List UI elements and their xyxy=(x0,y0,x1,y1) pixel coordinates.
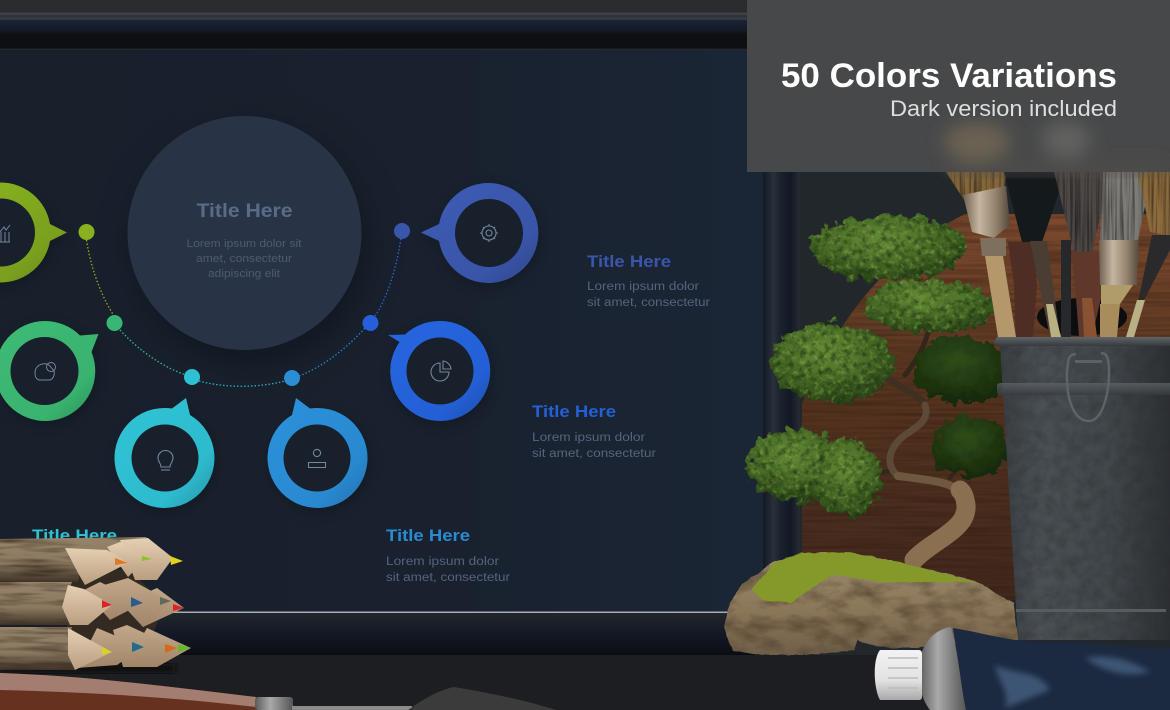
dark foliage clusters xyxy=(912,337,1012,478)
chart node: sea green dot xyxy=(106,315,122,331)
pencil row: middle xyxy=(0,578,184,627)
icon: person xyxy=(308,449,326,468)
moss xyxy=(752,552,977,603)
panel: wooden palette behind tree xyxy=(802,214,1170,600)
body: Lorem ipsum dolor xyxy=(386,556,499,568)
frame right post xyxy=(762,172,800,612)
icon: gear xyxy=(480,224,498,242)
knife rod xyxy=(292,706,412,710)
icon ring: indigo gear xyxy=(421,183,538,283)
illustration: metal bucket xyxy=(994,337,1170,640)
icon: light bulb xyxy=(158,451,173,470)
body xyxy=(532,432,656,460)
panel: translucent caption box xyxy=(747,0,1170,173)
central title: Title Here xyxy=(196,201,292,222)
brush: grey light bristles xyxy=(1099,172,1152,337)
illustration: rock with moss xyxy=(724,552,1018,655)
central disc xyxy=(128,116,362,350)
icon ring: sea green piggy bank xyxy=(0,321,99,421)
icon ring: cyan bulb xyxy=(114,398,214,508)
frame bottom xyxy=(0,612,763,656)
knife handle xyxy=(0,673,256,710)
knife blade xyxy=(408,687,556,710)
panel: central circle xyxy=(128,116,362,350)
body: sit amet, consectetur xyxy=(532,448,656,460)
body: Lorem ipsum dolor xyxy=(587,281,699,293)
central body text: adipiscing elit xyxy=(208,268,280,280)
panel: dark framed slide xyxy=(0,0,800,656)
tube shoulder xyxy=(919,627,966,710)
bucket band xyxy=(997,383,1170,395)
chart: dotted arc connecting the dots xyxy=(86,238,401,386)
illustration: paint brushes xyxy=(946,172,1170,337)
chart node: royal dot xyxy=(362,315,378,331)
knife ferrule xyxy=(255,697,293,710)
text block: indigo xyxy=(587,252,710,309)
bonsai trunk xyxy=(880,370,966,560)
rock xyxy=(724,552,1018,655)
pencil row: bottom xyxy=(0,625,191,670)
slide background xyxy=(0,50,763,612)
central body text: amet, consectetur xyxy=(196,253,292,265)
text block: cyan, partly hidden: Title Here xyxy=(32,526,117,545)
central body text: Lorem ipsum dolor sit xyxy=(186,238,302,250)
brush: black bristles xyxy=(1004,172,1066,337)
heading: Title Here xyxy=(587,252,671,271)
knife handle highlight xyxy=(0,673,256,707)
chart node: blue dot xyxy=(284,370,300,386)
icon: bar chart xyxy=(0,225,10,242)
brush: tan bristles xyxy=(946,172,1016,337)
central body text xyxy=(186,238,302,280)
illustration: paint tube xyxy=(875,627,1170,710)
icon ring: blue person xyxy=(268,398,368,508)
illustration: bonsai tree xyxy=(747,215,1012,560)
body xyxy=(386,556,510,584)
dark hole in palette xyxy=(1037,298,1127,336)
bucket lower band xyxy=(1016,609,1166,612)
caption subheading: Dark version included xyxy=(890,96,1117,121)
chart node: indigo dot xyxy=(394,223,410,239)
body xyxy=(587,281,710,309)
body: sit amet, consectetur xyxy=(587,297,710,309)
chart node: cyan dot xyxy=(184,369,200,385)
caption heading: 50 Colors Variations xyxy=(781,57,1117,95)
icon ring: green chart xyxy=(0,182,67,282)
frame top xyxy=(0,0,762,52)
pencil row: top xyxy=(0,537,183,585)
bucket body xyxy=(1000,345,1170,640)
pencil dark backing xyxy=(62,565,165,660)
pencil shadow on table xyxy=(0,664,175,673)
text block: royal blue xyxy=(532,402,656,460)
brush: grey bristles xyxy=(1054,172,1110,337)
tube highlight xyxy=(995,657,1150,708)
bucket handle xyxy=(1067,353,1109,421)
icon ring: royal blue pie chart xyxy=(388,321,490,421)
table surface xyxy=(0,655,1170,710)
heading: Title Here xyxy=(532,402,616,421)
illustration: palette knife xyxy=(0,673,556,710)
icon: piggy bank xyxy=(35,362,56,380)
body: Lorem ipsum dolor xyxy=(532,432,645,444)
tube cap ridges xyxy=(888,658,918,688)
icon: pie chart xyxy=(431,361,451,381)
caption background xyxy=(747,0,1170,172)
blurred brushes seen through caption xyxy=(944,122,1165,173)
heading: Title Here xyxy=(386,526,470,545)
text block: blue xyxy=(386,526,510,584)
brush: right edge xyxy=(1126,172,1170,337)
bonsai branches xyxy=(820,290,985,487)
bucket rim xyxy=(994,337,1170,346)
tube body xyxy=(953,628,1170,710)
chart node: green dot xyxy=(78,224,94,240)
illustration: colored pencils xyxy=(0,537,191,673)
lit foliage clusters xyxy=(747,215,996,518)
body: sit amet, consectetur xyxy=(386,572,510,584)
tube cap xyxy=(875,650,922,700)
